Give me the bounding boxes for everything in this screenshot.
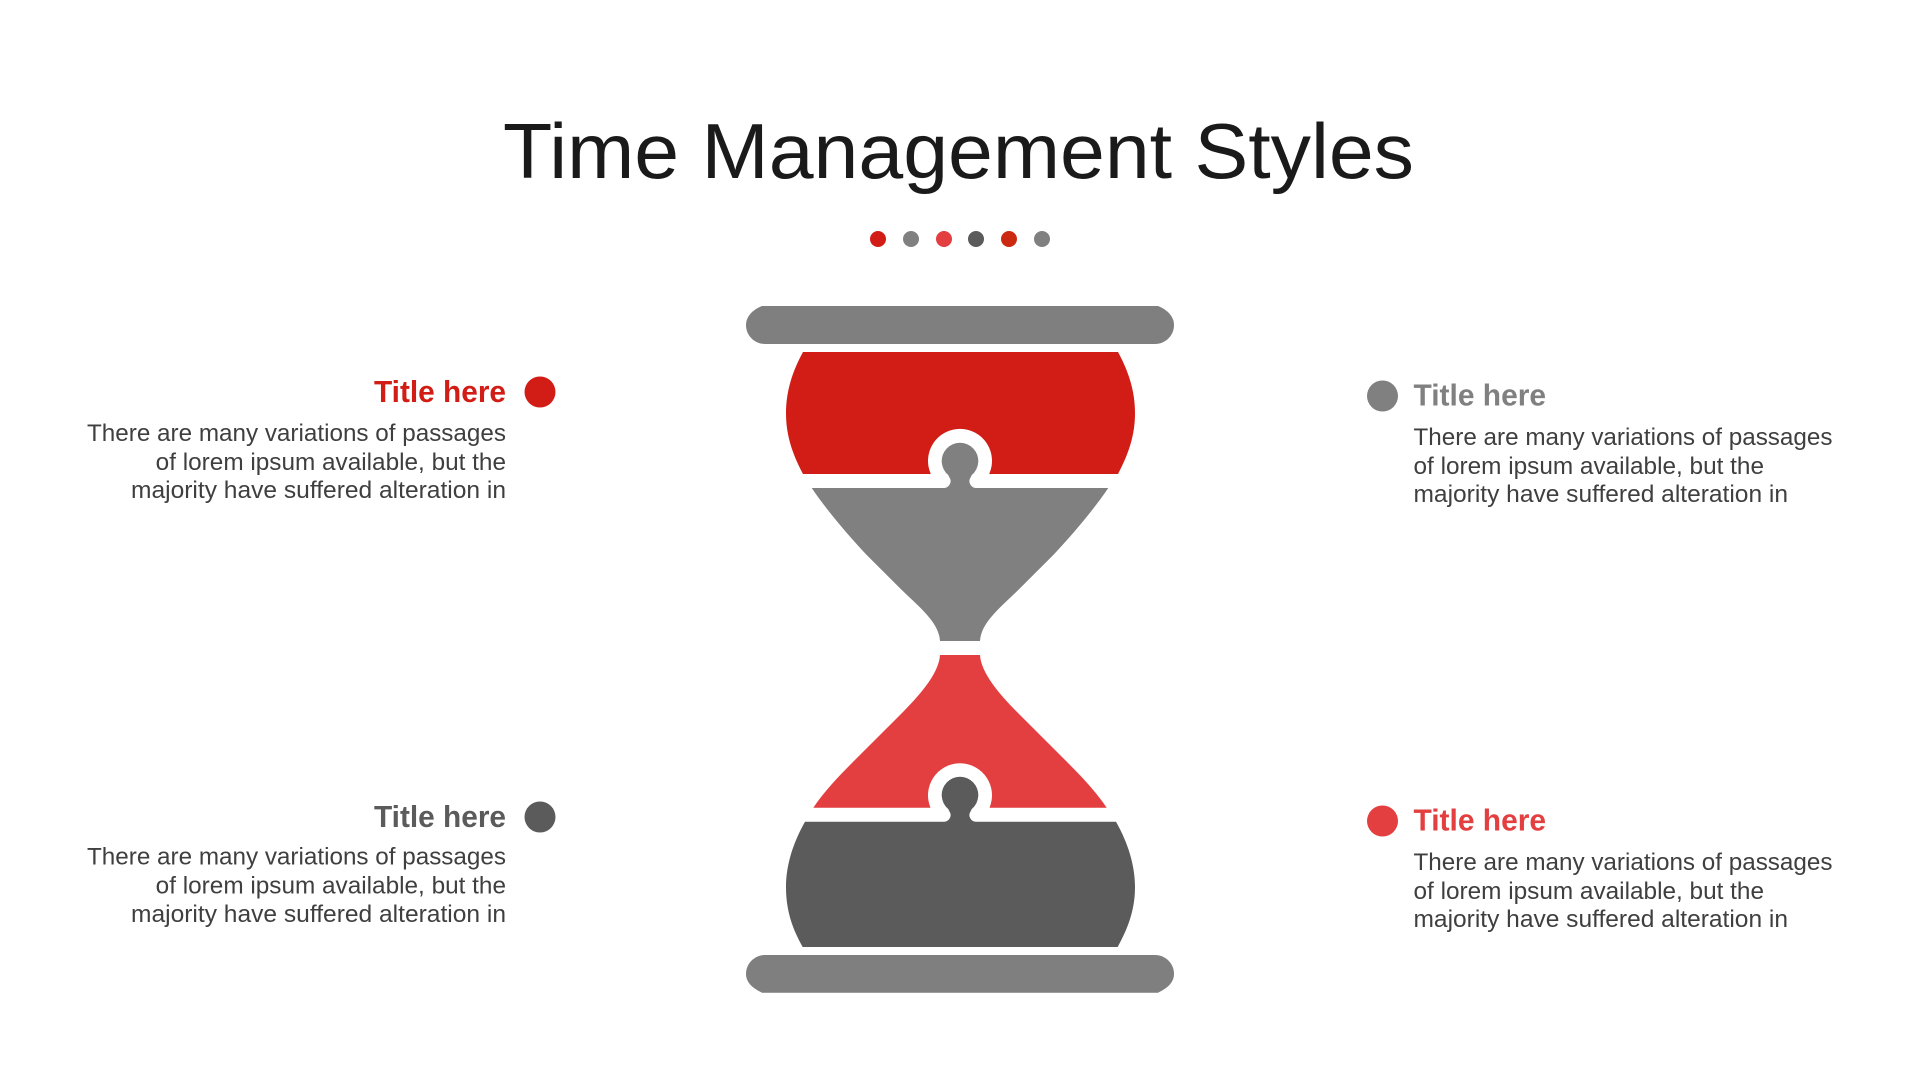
body text: majority have suffered alteration in [1414, 481, 1788, 508]
title: Time Management Styles [503, 107, 1414, 195]
body text [1414, 849, 1832, 933]
callout: bottom right light red [1367, 803, 1832, 933]
bullet [524, 802, 556, 832]
body text: of lorem ipsum available, but the [1414, 878, 1764, 905]
body text [1414, 424, 1832, 508]
hourglass lower light red funnel piece [813, 655, 1107, 808]
heading: Title here [374, 799, 506, 834]
bullet [524, 376, 556, 408]
callout: top left red [87, 374, 556, 504]
body text: of lorem ipsum available, but the [156, 872, 506, 900]
hourglass [746, 306, 1174, 993]
bullet [1367, 806, 1398, 836]
body text: majority have suffered alteration in [1414, 906, 1788, 933]
hourglass upper gray funnel piece [812, 443, 1108, 641]
bullet [1367, 380, 1398, 412]
body text: of lorem ipsum available, but the [1414, 453, 1764, 480]
body text: There are many variations of passages [87, 420, 506, 447]
heading: Title here [1414, 378, 1546, 413]
body text: majority have suffered alteration in [131, 901, 506, 928]
callout: bottom left dark gray [87, 799, 556, 928]
body text: There are many variations of passages [1414, 424, 1832, 451]
body text: There are many variations of passages [87, 844, 506, 870]
decorative colour dots row [870, 231, 1050, 247]
body text [87, 420, 506, 504]
hourglass top red puzzle piece [786, 352, 1135, 474]
body text [87, 844, 506, 928]
body text: There are many variations of passages [1414, 849, 1832, 876]
callout: top right gray [1367, 378, 1832, 508]
hourglass bottom dark puzzle piece [786, 777, 1135, 947]
heading: Title here [1414, 803, 1546, 838]
body text: of lorem ipsum available, but the [156, 449, 506, 476]
body text: majority have suffered alteration in [131, 477, 506, 504]
heading: Title here [374, 374, 506, 409]
hourglass bottom bar [746, 955, 1174, 993]
hourglass top bar [746, 306, 1174, 344]
